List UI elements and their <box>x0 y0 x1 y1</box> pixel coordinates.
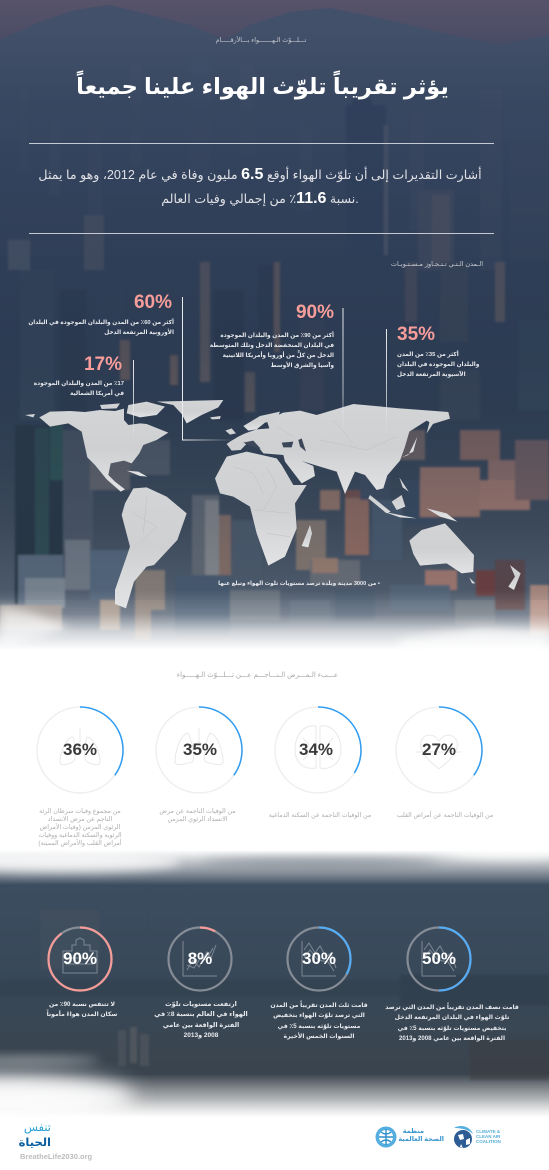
caption: heart disease: من الوفيات الناجمة عن أمراض القلب <box>397 812 493 819</box>
stat: 90 percent <box>210 302 334 369</box>
caption: 90 percent: لا تتنفس نسبة 90٪ من <box>49 1001 115 1008</box>
logo: Breathe Life: الحياة <box>19 1137 51 1149</box>
map: australia <box>409 523 474 573</box>
icon: falling line chart <box>422 941 456 976</box>
caption: 50 percent <box>385 1002 519 1042</box>
rings: air quality trends <box>47 926 472 992</box>
caption: 30 percent <box>270 1000 368 1040</box>
caption: lung cancer: من مجموع وفيات سرطان الرئة <box>39 808 121 815</box>
icon: lungs with trachea <box>60 728 100 765</box>
map: small north atlantic islands <box>25 414 236 477</box>
logo: Climate and Clean Air Coalition: COALITION <box>476 1139 501 1144</box>
cloud edge above lower section <box>0 845 549 872</box>
ring: 35 percent COPD <box>156 707 242 793</box>
icon: WHO emblem <box>376 1126 396 1148</box>
logo: WHO: الصحة العالمية <box>398 1136 444 1143</box>
cloud edge below lower section <box>0 1056 549 1170</box>
logo: Breathe Life <box>19 1122 92 1161</box>
stat: 90 percent: أكثر من 90٪ من المدن والبلدان الموجودة <box>220 333 334 339</box>
icon: lungs with dots <box>175 728 223 765</box>
icon: brain <box>295 726 341 768</box>
caption: 30 percent: قامت ثلث المدن تقريباً من المدن <box>270 1002 368 1009</box>
caption: lung cancer: الرئوي المزمن (وفيات الأمراض <box>40 824 120 831</box>
logo: Breathe Life: BreatheLife2030.org <box>20 1152 92 1161</box>
stat: 17 percent: 17% <box>84 354 122 375</box>
stat: 17 percent: ٪17 من المدن والبلدان الموجودة <box>34 381 124 387</box>
map: north and central america <box>39 409 168 492</box>
icon: coalition globe <box>454 1126 473 1148</box>
logo: Climate and Clean Air Coalition: CLIMATE & <box>476 1129 500 1134</box>
caption: COPD: من الوفيات الناجمة عن مرض <box>159 808 236 815</box>
caption: 8 percent <box>154 1001 248 1039</box>
map footnote: • من 3000 مدينة وبلدة ترصد مستويات تلوث الهواء وتبلغ عنها <box>218 581 380 587</box>
stat: 60 percent <box>28 292 174 336</box>
intro paragraph <box>38 166 482 207</box>
caption: 50 percent: الفترة الواقعة بين عامي 2008 و2013 <box>399 1035 505 1042</box>
ring: 34 percent stroke <box>275 707 361 793</box>
value: 30 percent: 30% <box>302 949 336 968</box>
caption: stroke: من الوفيات الناجمة عن السكتة الدماغية <box>269 812 371 819</box>
icon: heart with pulse <box>416 735 461 769</box>
icon: falling line chart <box>302 941 336 976</box>
caption: 90 percent <box>46 1001 117 1018</box>
ring: 27 percent heart disease <box>396 707 482 793</box>
caption: 30 percent: التي ترصد تلوّث الهواء بتخفيض <box>273 1012 365 1019</box>
caption: 30 percent: السنوات الخمس الأخيرة <box>284 1033 354 1040</box>
ring: 36 percent lung cancer <box>37 707 123 793</box>
map: madagascar <box>302 525 312 547</box>
ring: 90 percent <box>48 928 112 990</box>
small heading: air pollution in numbers: تـــلـــوّث الـهـــــــواء بـــالأرقـــــام <box>216 37 306 44</box>
value: 34 percent: 34% <box>299 740 333 759</box>
cloud transition after the map <box>0 590 549 870</box>
callout lines over the map <box>133 297 387 440</box>
stat: 35 percent: والبلدان الموجودة في البلدان <box>397 362 479 368</box>
logo: Breathe Life: تنفس <box>24 1122 51 1134</box>
logo: WHO <box>376 1126 444 1148</box>
caption: COPD: الانسداد الرئوي المزمن <box>167 816 228 823</box>
caption: lung cancer: الناجم عن مرض الانسداد <box>48 816 112 823</box>
caption: 8 percent: الفترة الواقعة بين عامي <box>163 1022 239 1029</box>
logo: WHO: منظمة <box>403 1128 424 1135</box>
ring: 8 percent <box>168 928 232 990</box>
stat: 35 percent: أكثر من 35٪ من المدن <box>397 352 459 358</box>
lower section dark band <box>0 850 549 1120</box>
stat: 35 percent: الآسيوية المرتفعة الدخل <box>397 372 466 378</box>
caption: lung cancer: الرئوية والسكتة الدماغية ووفيات <box>38 832 122 839</box>
map: new zealand and tasmania <box>469 565 521 590</box>
caption: lung cancer <box>38 808 122 847</box>
stat: 60 percent: الأوروبية المرتفعة الدخل <box>104 330 174 336</box>
value: 36 percent: 36% <box>63 740 97 759</box>
stat: 60 percent: 60% <box>134 292 172 313</box>
stat: 90 percent: الدخل من كلٍّ من أوروبا وأمريكا اللاتينية <box>223 353 334 359</box>
stat: 35 percent: 35% <box>397 324 435 345</box>
caption: 50 percent: بتخفيض مستويات تلوّثه بنسبة 5٪ في <box>398 1025 506 1032</box>
icon: city buildings <box>63 938 97 973</box>
map: south america <box>115 487 187 608</box>
value: 35 percent: 35% <box>183 740 217 759</box>
stat: 60 percent: أكثر من 60٪ من المدن والبلدان الموجودة في البلدان <box>28 320 174 326</box>
section label: cities exceeding levels: الـمدن الـتـي تـتـجـاوز مـسـتـويـات <box>391 261 483 268</box>
stat: 90 percent: 90% <box>296 302 334 323</box>
main title: يؤثر تقريباً تلوّث الهواء علينا جميعاً <box>76 74 449 99</box>
caption: lung cancer: أمراض القلب والأمراض المميتة) <box>38 840 122 847</box>
stat: 90 percent: وآسيا والشرق الأوسط <box>271 363 334 369</box>
map: country borders <box>133 420 397 543</box>
section heading: burden of disease: عـــبء الـمـــرض الـنـــاجـــم عـــن تـــلـــوّث الـهـــــواء <box>177 672 338 679</box>
map: africa <box>215 452 307 566</box>
caption: 8 percent: 2008 و2013 <box>184 1032 218 1039</box>
caption: COPD <box>159 808 236 823</box>
divider top <box>29 143 494 144</box>
map: eurasia <box>227 404 450 494</box>
ring: 50 percent <box>408 928 470 990</box>
caption: 8 percent: الهواء في العالم بنسبة 8٪ في <box>154 1011 248 1018</box>
ring: 30 percent <box>288 928 350 990</box>
stat: 35 percent <box>397 324 479 378</box>
icon: rising line chart <box>183 941 217 976</box>
map: inland seas <box>243 438 306 452</box>
divider bottom <box>29 233 494 234</box>
map: japan <box>402 420 433 457</box>
map: arctic islands <box>100 402 165 417</box>
value: 8 percent: 8% <box>188 949 212 968</box>
value: 27 percent: 27% <box>422 740 456 759</box>
rings: disease burden <box>36 706 483 794</box>
caption: 30 percent: مستويات تلوّثه بنسبة 5٪ في <box>278 1023 360 1030</box>
stat: 90 percent: في البلدان المنخفضة الدخل وتلك المتوسطة <box>210 343 334 349</box>
world map <box>25 400 521 608</box>
map: southeast asia islands <box>368 477 457 522</box>
caption: 50 percent: تلوّث الهواء في البلدان المرتفعة الدخل <box>395 1014 509 1021</box>
logo: Climate and Clean Air Coalition: CLEAN AIR <box>476 1134 500 1139</box>
value: 50 percent: 50% <box>422 949 456 968</box>
stat: 17 percent <box>34 354 124 397</box>
stat: 17 percent: في أمريكا الشمالية <box>70 391 124 397</box>
logo: Climate and Clean Air Coalition <box>454 1126 501 1148</box>
caption: 8 percent: ارتفعت مستويات تلوّث <box>165 1001 237 1008</box>
map: scandinavia <box>243 412 280 431</box>
caption: 50 percent: قامت نصف المدن تقريباً من المدن التي ترصد <box>385 1004 519 1011</box>
intro paragraph: .نسبة 11.6٪ من إجمالي وفيات العالم <box>161 190 359 207</box>
caption: 90 percent: سكان المدن هواءً مأموناً <box>47 1011 117 1018</box>
value: 90 percent: 90% <box>63 949 97 968</box>
map: greenland <box>157 400 223 423</box>
intro paragraph: أشارت التقديرات إلى أن تلوّث الهواء أوقع 6.5 مليون وفاة في عام 2012، وهو ما يمثل <box>38 166 482 183</box>
